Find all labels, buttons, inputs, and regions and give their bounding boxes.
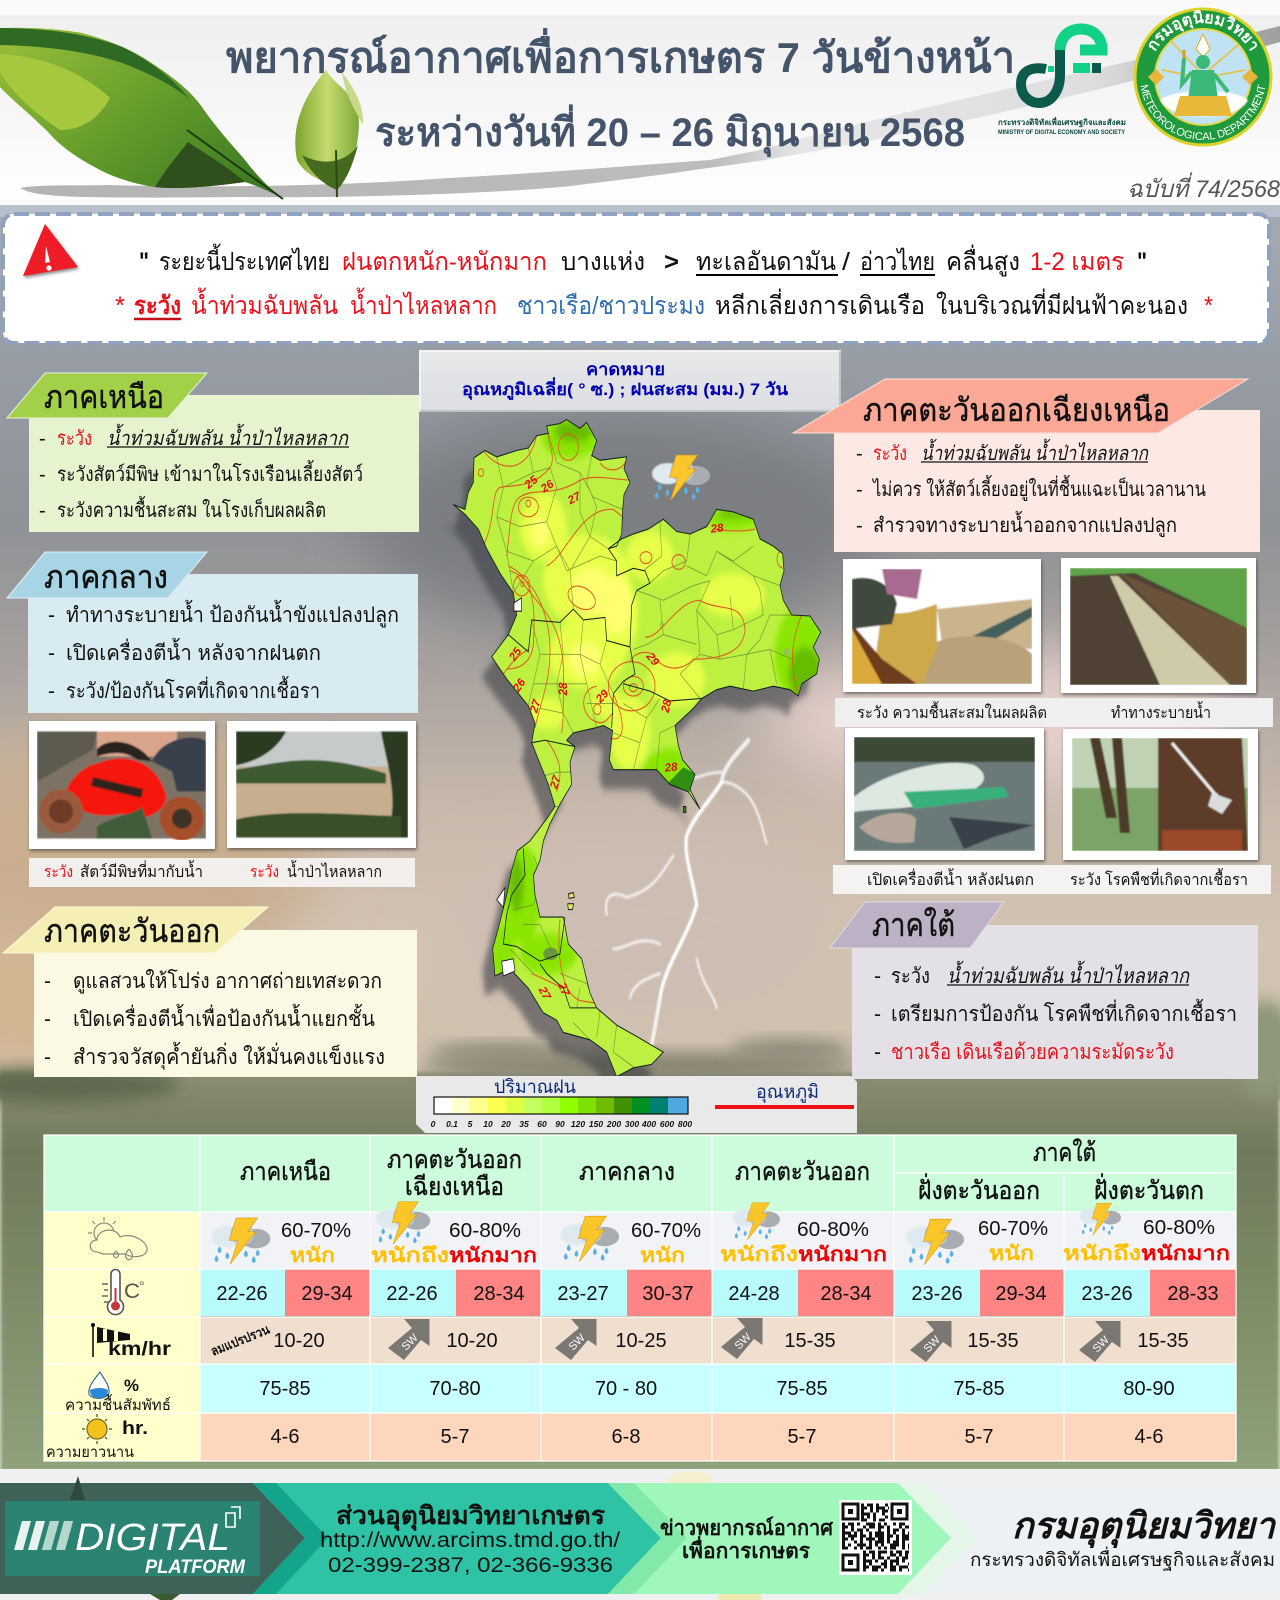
icon: storm cloud over map	[652, 455, 710, 501]
legend: rainfall colour scale and temperature line: ปริมาณฝน	[494, 1077, 576, 1098]
issue number: ฉบับที่ 74/2568	[1127, 172, 1280, 203]
temperature row: 28-34	[820, 1283, 872, 1305]
thailand temperature and rainfall map	[448, 419, 822, 1076]
wind row: 10-20	[273, 1330, 325, 1352]
wind arrow: south east coast	[910, 1321, 952, 1362]
storm icon and rain chance: northeast: 60-80%	[449, 1220, 521, 1242]
table column headings: ฝั่งตะวันออก	[918, 1173, 1040, 1205]
map outline and region borders	[453, 420, 821, 1077]
humidity row: 70-80	[429, 1378, 481, 1400]
wind row: 15-35	[967, 1330, 1019, 1352]
row icon: humidity: ความชื้นสัมพัทธ์	[65, 1394, 171, 1414]
temperature row: 28-33	[1167, 1283, 1219, 1305]
seal: meteorological department: METEOROLOGICAL DEPARTMENT	[1140, 84, 1265, 140]
map temperature labels: 29	[643, 650, 661, 669]
footer	[0, 1469, 1280, 1600]
map drop shadow	[443, 439, 811, 1096]
storm icon and rain chance: north	[212, 1218, 351, 1267]
caption bar: right photos top: ทำทางระบายน้ำ	[1111, 701, 1211, 722]
panel: northeast: -	[856, 515, 863, 537]
warning line 1: "	[1137, 248, 1147, 276]
footer division name and contact: 02-399-2387, 02-366-9336	[328, 1554, 613, 1577]
warning line 2: น้ำป่าไหลหลาก	[350, 287, 497, 320]
rainfall scale labels: 800	[678, 1119, 692, 1129]
table column headings: เฉียงเหนือ	[405, 1173, 504, 1201]
panel: south: น้ำท่วมฉับพลัน น้ำป่าไหลหลาก	[947, 960, 1190, 988]
map temperature labels: 27	[565, 490, 583, 508]
wind row: 15-35	[784, 1330, 836, 1352]
row icon: humidity	[65, 1372, 171, 1414]
map temperature labels: 27	[548, 774, 564, 791]
rainfall scale labels	[431, 1119, 692, 1129]
icon: warning triangle	[23, 224, 78, 276]
footer division name and contact: ส่วนอุตุนิยมวิทยาเกษตร	[336, 1502, 606, 1532]
wind arrow: east: SW	[733, 1331, 754, 1352]
warning line 2	[115, 287, 1213, 320]
footer division name and contact	[320, 1502, 620, 1577]
footer division name and contact: http://www.arcims.tmd.go.th/	[320, 1529, 620, 1552]
digital platform badge: DIGITAL	[75, 1517, 230, 1559]
panel: north	[7, 373, 419, 532]
rainfall scale labels: 200	[606, 1119, 621, 1129]
warning line 2: หลีกเลี่ยงการเดินเรือ	[715, 288, 925, 320]
row icon: sunshine: ความยาวนาน	[46, 1444, 134, 1461]
map temperature labels: 28	[709, 522, 725, 536]
sunshine row: 5-7	[788, 1426, 816, 1448]
panel: south: ระวัง	[891, 965, 930, 988]
forecast table	[44, 1135, 1236, 1461]
wind arrow: south east coast: SW	[922, 1334, 943, 1355]
warning line 1: "	[139, 248, 149, 276]
warning line 1: ระยะนี้ประเทศไทย	[159, 243, 330, 276]
rainfall scale labels: 300	[625, 1119, 639, 1129]
panel: south: ภาคใต้	[872, 907, 955, 943]
storm icon and rain chance: northeast: หนักมาก	[449, 1245, 537, 1267]
warning line 2: ชาวเรือ/ชาวประมง	[517, 292, 705, 320]
storm icon and rain chance: east: 60-80%	[797, 1219, 869, 1241]
small leaf	[295, 70, 363, 197]
panel: northeast: ระวัง	[873, 443, 907, 465]
map temperature labels: 28	[659, 698, 674, 715]
storm icon and rain chance: south west coast: หนักถึง	[1063, 1243, 1141, 1265]
humidity row: 75-85	[953, 1378, 1005, 1400]
storm icon and rain chance: south west coast	[1063, 1203, 1230, 1265]
storm icon and rain chance: northeast	[371, 1202, 537, 1267]
panel: north: น้ำท่วมฉับพลัน น้ำป่าไหลหลาก	[107, 423, 349, 450]
rainfall colour bar	[434, 1097, 688, 1114]
lightning bolt	[606, 740, 767, 1052]
logo: ministry of digital economy and society	[998, 29, 1126, 136]
humidity row: 80-90	[1123, 1378, 1175, 1400]
panel: east: -	[44, 1046, 51, 1069]
sunshine row: 5-7	[441, 1426, 469, 1448]
warning line 1: ทะเลอันดามัน	[696, 248, 836, 276]
rainfall scale labels: 90	[555, 1119, 565, 1129]
caption bar: left photos: ระวัง	[250, 864, 279, 881]
wind arrow: central	[555, 1319, 596, 1360]
wind arrow: east	[721, 1318, 762, 1359]
row icon: weather	[88, 1217, 147, 1260]
date subtitle: ระหว่างวันที่ 20 – 26 มิถุนายน 2568	[375, 104, 965, 158]
swoosh shadow	[20, 26, 1280, 198]
panel: south: -	[874, 1003, 881, 1026]
panel: central: ภาคกลาง	[44, 559, 168, 595]
row icon: temperature	[102, 1270, 145, 1315]
panel: south: -	[874, 1041, 881, 1064]
wind arrow: northeast: SW	[400, 1332, 421, 1353]
footer agricultural forecast news label: ข่าวพยากรณ์อากาศ	[660, 1516, 834, 1540]
temperature row: 28-34	[473, 1283, 525, 1305]
row icon: temperature: C	[124, 1280, 140, 1303]
sunshine row: 6-8	[612, 1426, 640, 1448]
wind arrow: south west coast: SW	[1091, 1334, 1112, 1355]
photo: flash flood	[227, 721, 416, 848]
warning line 2: *	[115, 292, 125, 320]
row icon: sunshine: hr.	[122, 1418, 148, 1438]
wind arrow: south west coast	[1079, 1321, 1120, 1362]
rainfall scale labels: 0.1	[446, 1119, 458, 1129]
warning line 2: ระวัง	[134, 292, 181, 320]
panel: central: ทำทางระบายน้ำ ป้องกันน้ำขังแปลงปลูก	[66, 600, 399, 628]
footer agricultural forecast news label	[660, 1516, 834, 1563]
panel: central	[7, 552, 418, 713]
big leaf	[0, 28, 283, 199]
humidity row: 70 - 80	[595, 1378, 657, 1400]
panel: northeast: สำรวจทางระบายน้ำออกจากแปลงปลูก	[873, 511, 1177, 538]
panel: south: เตรียมการป้องกัน โรคพืชที่เกิดจากเชื้อรา	[891, 999, 1237, 1026]
sunshine row: 5-7	[965, 1426, 993, 1448]
panel: east: สำรวจวัสดุค้ำยันกิ่ง ให้มั่นคงแข็งแรง	[73, 1042, 385, 1070]
photo: drainage ditch	[1061, 558, 1256, 693]
storm icon and rain chance: south west coast: หนักมาก	[1141, 1243, 1230, 1265]
footer department name: กระทรวงดิจิทัลเพื่อเศรษฐกิจและสังคม	[970, 1546, 1275, 1571]
warning line 1: 1-2 เมตร	[1030, 248, 1124, 276]
table column headings: ภาคตะวันออก	[387, 1146, 522, 1174]
rainfall scale labels: 400	[641, 1119, 656, 1129]
storm icon and rain chance: northeast: หนักถึง	[371, 1245, 449, 1267]
panel: central: -	[48, 642, 55, 665]
panel: northeast: ภาคตะวันออกเฉียงเหนือ	[863, 392, 1170, 428]
table backgrounds	[44, 1135, 1236, 1461]
legend: rainfall colour scale and temperature line	[416, 1076, 857, 1133]
temperature row: 23-26	[911, 1283, 963, 1305]
table column headings: ภาคเหนือ	[240, 1158, 331, 1186]
photo: rubber tree	[1063, 729, 1258, 860]
row icon: temperature: °	[139, 1278, 145, 1294]
temperature row: 29-34	[301, 1283, 353, 1305]
map temperature labels: 27	[555, 980, 571, 998]
warning line 2: *	[1204, 292, 1213, 320]
legend: rainfall colour scale and temperature line: อุณหภูมิ	[756, 1082, 819, 1104]
rain chance row	[212, 1202, 1230, 1267]
row icon: humidity: %	[124, 1376, 139, 1395]
caption bar: right photos bottom	[833, 865, 1271, 894]
caption bar: right photos top: ระวัง ความชื้นสะสมในผลผลิต	[857, 701, 1047, 722]
qr code	[839, 1500, 912, 1575]
table column headings: ฝั่งตะวันตก	[1094, 1173, 1204, 1205]
logo: ministry of digital economy and society: MINISTRY OF DIGITAL ECONOMY AND SOCIETY	[998, 130, 1125, 136]
warning line 1: /	[842, 248, 850, 276]
map temperature labels: 29	[593, 687, 612, 706]
panel: east: ดูแลสวนให้โปร่ง อากาศถ่ายเทสะดวก	[73, 969, 382, 994]
table column headings: ภาคตะวันออก	[735, 1158, 870, 1186]
caption bar: left photos: น้ำป่าไหลหลาก	[287, 860, 382, 881]
footer department name: กรมอุตุนิยมวิทยา	[1012, 1505, 1277, 1548]
rainfall scale labels: 120	[571, 1119, 585, 1129]
table column headings: ภาคใต้	[1033, 1138, 1096, 1167]
panel: east: ภาคตะวันออก	[44, 913, 220, 949]
wind arrow: central: SW	[567, 1332, 588, 1353]
rainfall scale labels: 20	[500, 1119, 511, 1129]
band under header	[0, 205, 1280, 217]
panel: east: -	[44, 970, 51, 993]
panel: east	[3, 907, 417, 1077]
storm icon and rain chance: east: หนักถึง	[720, 1244, 798, 1266]
temperature row: 22-26	[216, 1283, 268, 1305]
caption bar: left photos: สัตว์มีพิษที่มากับน้ำ	[80, 860, 203, 881]
warning line 1: ฝนตกหนัก-หนักมาก	[342, 248, 547, 276]
panel: east: เปิดเครื่องตีน้ำเพื่อป้องกันน้ำแยกชั้น	[73, 1004, 375, 1031]
rainfall scale labels: 60	[537, 1119, 547, 1129]
humidity row: 75-85	[776, 1378, 828, 1400]
temperature row: 23-27	[557, 1283, 609, 1305]
storm icon and rain chance: north: หนัก	[290, 1245, 335, 1267]
footer department name	[970, 1505, 1277, 1571]
map temperature labels: 28	[558, 682, 570, 696]
wind row: 10-20	[446, 1330, 498, 1352]
panel: central: ระวัง/ป้องกันโรคที่เกิดจากเชื้อรา	[66, 676, 320, 703]
storm icon and rain chance: south west coast: 60-80%	[1143, 1217, 1215, 1239]
warning line 1: บางแห่ง	[561, 248, 645, 276]
warning line 2: ในบริเวณที่มีฝนฟ้าคะนอง	[936, 288, 1188, 320]
humidity row	[259, 1378, 1175, 1400]
rainfall scale labels: 35	[519, 1119, 529, 1129]
panel: north: ระวังความชื้นสะสม ในโรงเก็บผลผลิต	[57, 496, 326, 522]
panel: south	[830, 902, 1258, 1079]
storm icon and rain chance: central: 60-70%	[631, 1220, 701, 1242]
map temperature labels: 28	[663, 761, 679, 775]
map temperature labels: 25	[507, 645, 525, 664]
islands	[497, 598, 686, 976]
rainfall scale labels: 150	[589, 1119, 603, 1129]
row icon: sunshine	[46, 1414, 148, 1461]
panel: northeast: -	[856, 479, 863, 501]
rainfall scale labels: 0	[431, 1119, 436, 1129]
digital platform badge: PLATFORM	[145, 1557, 246, 1578]
humidity row: 75-85	[259, 1378, 311, 1400]
seal: meteorological department	[1134, 8, 1272, 146]
temperature row: 30-37	[642, 1283, 694, 1305]
map temperature labels: 26	[511, 676, 529, 695]
temperature row: 23-26	[1081, 1283, 1133, 1305]
panel: northeast: น้ำท่วมฉับพลัน น้ำป่าไหลหลาก	[921, 438, 1149, 465]
warning line 2: น้ำท่วมฉับพลัน	[191, 287, 338, 320]
temperature row	[216, 1283, 1219, 1305]
panel: south: ชาวเรือ เดินเรือด้วยความระมัดระวัง	[891, 1041, 1174, 1064]
wind row: 15-35	[1137, 1330, 1189, 1352]
storm icon and rain chance: east	[720, 1203, 887, 1266]
panel: northeast: -	[856, 443, 863, 465]
rainfall scale labels: 10	[483, 1119, 493, 1129]
storm icon and rain chance: central: หนัก	[640, 1245, 685, 1267]
warning line 1: อ่าวไทย	[860, 247, 935, 276]
panel: northeast: ไม่ควร ให้สัตว์เลี้ยงอยู่ในที่ชื้นแฉะเป็นเวลานาน	[871, 475, 1206, 502]
wind row: 10-25	[615, 1330, 667, 1352]
caption bar: left photos	[29, 858, 415, 887]
caption bar: right photos bottom: เปิดเครื่องตีน้ำ หลังฝนตก	[867, 868, 1034, 889]
warning line 1: >	[664, 248, 679, 276]
map temperature labels	[507, 474, 725, 1003]
photo: venomous animals	[29, 721, 215, 849]
wind arrow: northeast	[388, 1319, 430, 1360]
panel: north: ภาคเหนือ	[44, 379, 164, 415]
panel: north: ระวังสัตว์มีพิษ เข้ามาในโรงเรือนเลี้ยงสัตว์	[57, 460, 363, 486]
table column headings	[240, 1138, 1204, 1205]
panel: northeast	[793, 379, 1260, 552]
temperature contours	[478, 433, 802, 1003]
temperature row: 29-34	[995, 1283, 1047, 1305]
row icon: wind: km/hr	[108, 1339, 172, 1360]
seal: meteorological department: กรมอุตุนิยมวิทยา	[1148, 10, 1257, 52]
warning line 1	[139, 243, 1147, 277]
wind row: ลมแปรปรวน	[209, 1322, 272, 1359]
rainfall scale labels: 600	[660, 1119, 674, 1129]
panel: south: -	[874, 965, 881, 988]
panel: north: -	[39, 464, 46, 486]
storm icon and rain chance: north: 60-70%	[281, 1220, 351, 1242]
temperature row: 24-28	[728, 1283, 780, 1305]
panel: north: -	[39, 428, 46, 450]
warning line 1: คลื่นสูง	[946, 244, 1020, 277]
wind row	[209, 1318, 1189, 1362]
map temperature labels: 25	[522, 474, 541, 492]
map rainfall fill	[456, 420, 820, 1076]
map legend title box: คาดหมาย	[586, 360, 665, 379]
panel: central: -	[48, 604, 55, 627]
panel: central: เปิดเครื่องตีน้ำ หลังจากฝนตก	[66, 638, 321, 665]
warning box	[3, 214, 1269, 343]
storm icon and rain chance: south east coast: 60-70%	[978, 1218, 1048, 1240]
panel: north: ระวัง	[57, 428, 92, 450]
caption bar: right photos top	[835, 698, 1273, 727]
panel: central: -	[48, 680, 55, 703]
panel: east: -	[44, 1008, 51, 1031]
logo: ministry of digital economy and society: กระทรวงดิจิทัลเพื่อเศรษฐกิจและสังคม	[998, 116, 1126, 128]
panel: north: -	[39, 500, 46, 522]
caption bar: left photos: ระวัง	[44, 864, 73, 881]
background: stormy sky	[0, 200, 1280, 1472]
sunshine row: 4-6	[1135, 1426, 1163, 1448]
storm icon and rain chance: east: หนักมาก	[798, 1244, 887, 1266]
table column headings: ภาคกลาง	[579, 1158, 675, 1186]
temperature row: 22-26	[386, 1283, 438, 1305]
rainfall scale labels: 5	[468, 1119, 473, 1129]
storm icon and rain chance: central	[561, 1216, 701, 1267]
row icon: wind	[91, 1323, 172, 1360]
map legend title box: อุณหภูมิเฉลี่ย( ° ซ.) ; ฝนสะสม (มม.) 7 วัน	[462, 377, 788, 401]
title: พยากรณ์อากาศเพื่อการเกษตร 7 วันข้างหน้า	[226, 28, 1015, 81]
district boundaries	[497, 433, 792, 1067]
sunshine row: 4-6	[271, 1426, 299, 1448]
photo: rice harvest storage	[843, 559, 1041, 692]
map temperature labels: 27	[528, 698, 544, 715]
storm icon and rain chance: south east coast: หนัก	[989, 1243, 1034, 1265]
sunshine row	[271, 1426, 1163, 1448]
photo: water aerator and aquatic animals	[845, 728, 1044, 860]
caption bar: right photos bottom: ระวัง โรคพืชที่เกิดจากเชื้อรา	[1070, 868, 1248, 889]
digital platform badge	[5, 1501, 260, 1578]
storm icon and rain chance: south east coast	[906, 1218, 1048, 1265]
footer agricultural forecast news label: เพื่อการเกษตร	[682, 1535, 811, 1563]
header band	[0, 8, 1280, 205]
map legend title box	[420, 351, 840, 411]
map temperature labels: 26	[538, 478, 557, 496]
map temperature labels: 27	[535, 984, 553, 1003]
